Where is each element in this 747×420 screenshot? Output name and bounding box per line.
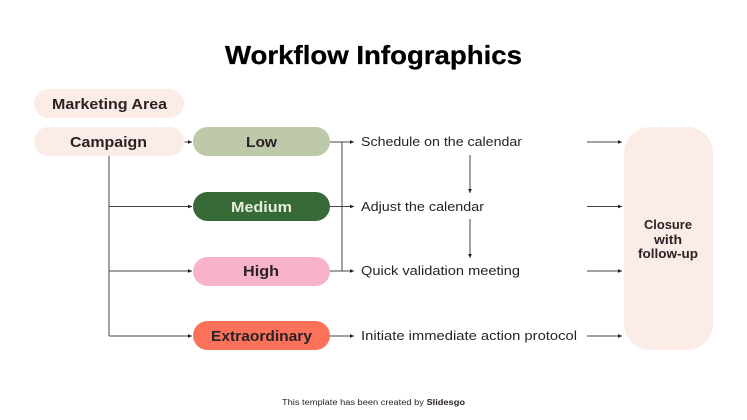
pill: Marketing Area: Marketing Area (52, 96, 168, 113)
pill: Campaign (34, 127, 184, 156)
pill: Extraordinary (193, 321, 330, 350)
arrow: Adjust to Quick validation (469, 219, 471, 258)
pill: High (193, 257, 330, 286)
title: Workflow Infographics (225, 40, 522, 70)
text: Adjust the calendar: Adjust the calendar (361, 199, 485, 214)
panel: Closure with follow-up: with (653, 233, 682, 247)
pill: Extraordinary: Extraordinary (211, 328, 313, 345)
text: Quick validation meeting: Quick validation meeting (361, 263, 520, 278)
pill: Low (193, 127, 330, 156)
connector: Campaign to Medium, High and Extraordinary (109, 156, 192, 336)
text: Schedule on the calendar: Schedule on the calendar (361, 134, 523, 149)
arrows: actions to closure (587, 142, 622, 336)
arrow: Campaign to Low (184, 141, 192, 143)
pill: High: High (243, 263, 279, 280)
pill: Medium (193, 192, 330, 221)
pill: Campaign: Campaign (70, 134, 147, 151)
pill: Medium: Medium (231, 199, 292, 216)
footer credit: This template has been created by Slidesgo (282, 398, 465, 407)
panel: Closure with follow-up: Closure (644, 218, 692, 232)
pill: Low: Low (246, 134, 277, 151)
panel: Closure with follow-up (624, 127, 713, 350)
connector: priority levels to actions (330, 142, 354, 336)
arrow: Schedule to Adjust (469, 155, 471, 193)
pill: Marketing Area (34, 89, 184, 118)
panel: Closure with follow-up: follow-up (638, 247, 698, 261)
text: Initiate immediate action protocol: Initiate immediate action protocol (361, 328, 577, 343)
